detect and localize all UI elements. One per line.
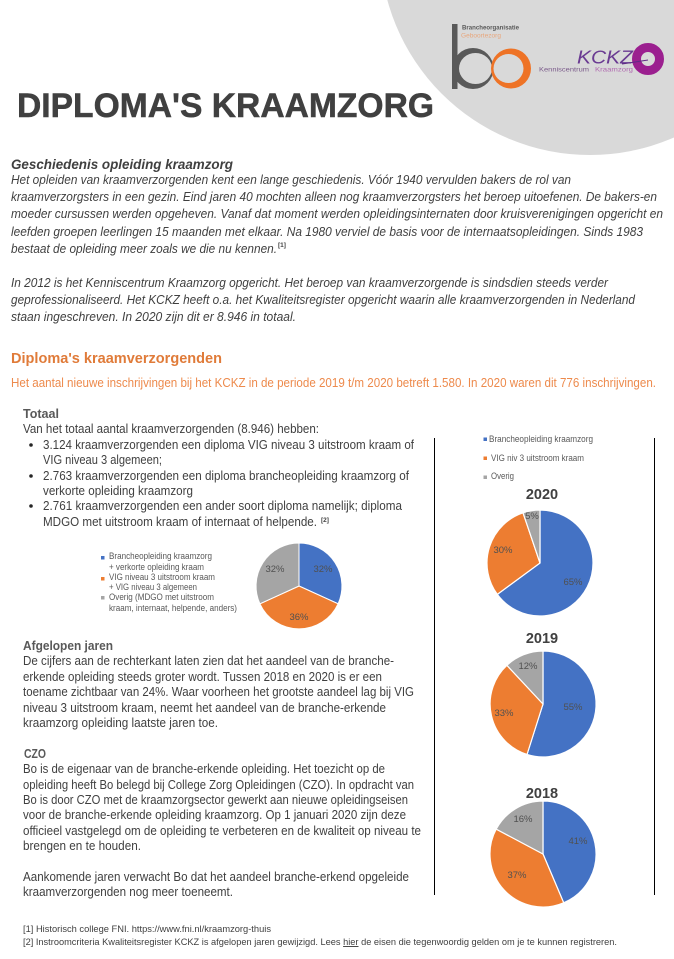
text block: Kenniscentrum: In 2012 is het Kenniscentrum Kraamzorg opgericht. Het beroep van kraamverzorgende is sindsdien steeds verder bbox=[11, 276, 609, 290]
legend: jaren pies: Brancheopleiding kraamzorg bbox=[489, 434, 593, 444]
year label: 2020: 2020 bbox=[526, 487, 558, 503]
footnotes bbox=[23, 924, 617, 948]
pie chart: 2019: 12% bbox=[518, 661, 538, 672]
year label: 2018: 2018 bbox=[526, 786, 558, 802]
right divider line bbox=[654, 438, 655, 895]
legend: totaal pie: Overig (MDGO met uitstroom bbox=[109, 592, 214, 602]
header grey circle bbox=[380, 0, 674, 155]
pie chart: 2020: 65% bbox=[563, 577, 583, 588]
footnotes: [2] Instroomcriteria Kwaliteitsregister KCKZ is afgelopen jaren gewijzigd. Lees hier de eisen die tegenwoordig gelden om je te kunnen registreren. bbox=[23, 937, 617, 948]
text block: CZO: opleiding heeft Bo belegd bij College Zorg Opleidingen (CZO). In opdracht van bbox=[23, 778, 414, 792]
text block: afgelopen jaren bbox=[23, 654, 414, 730]
logo: KCKZ Kenniscentrum Kraamzorg: KCKZ bbox=[577, 48, 634, 68]
logo: KCKZ Kenniscentrum Kraamzorg: Kraamzorg bbox=[595, 66, 633, 74]
text block: geschiedenis: bestaat de opleiding meer zoals we die nu kennen. bbox=[11, 242, 277, 256]
text block: CZO: brengen en te houden. bbox=[23, 839, 141, 853]
pie chart: 2020 bbox=[487, 510, 593, 616]
heading: Diploma's kraamverzorgenden: Diploma's kraamverzorgenden bbox=[11, 350, 222, 367]
text block: vooruitblik: Aankomende jaren verwacht Bo dat het aandeel branche-erkend opgeleide bbox=[23, 870, 409, 884]
text block: geschiedenis bbox=[11, 173, 663, 256]
heading: Afgelopen jaren: Afgelopen jaren bbox=[23, 639, 113, 653]
legend: jaren pies bbox=[484, 434, 593, 481]
text block: CZO: officieel vastgelegd om de opleiding te verbeteren en de kwaliteit op niveau te bbox=[23, 824, 421, 838]
text block: geschiedenis: kraamverzorgsters in een gezin. Eind jaren 40 mochten alleen nog kraamverzorgsters het beroep uitoefenen. De bakers-en bbox=[11, 190, 657, 204]
pie chart: totaal: 32% bbox=[313, 564, 333, 575]
text block: Kenniscentrum: staan ingeschreven. In 2020 zijn dit er 8.946 in totaal. bbox=[11, 310, 296, 324]
heading: Totaal: Totaal bbox=[23, 407, 59, 421]
text block: totaal: verkorte opleiding kraamzorg bbox=[43, 484, 193, 498]
pie chart: 2018 bbox=[490, 801, 596, 907]
text block: vooruitblik bbox=[23, 870, 409, 899]
pie chart: totaal bbox=[256, 543, 342, 629]
legend: totaal pie: VIG niveau 3 uitstroom kraam bbox=[109, 572, 215, 582]
text block: geschiedenis: Het opleiden van kraamverzorgenden kent een lange geschiedenis. Vóór 1940 vervulden bakers de rol van bbox=[11, 173, 571, 187]
legend: totaal pie: Brancheopleiding kraamzorg bbox=[109, 551, 212, 561]
text block: Kenniscentrum bbox=[11, 276, 636, 324]
text block: geschiedenis: moeder cursussen werden opgeheven. Vanaf dat moment werden opleidingsinternaten door kruisverenigingen opgericht en bbox=[11, 207, 663, 221]
text block: totaal: VIG niveau 3 algemeen; bbox=[43, 453, 162, 467]
title: DIPLOMA'S KRAAMZORG bbox=[17, 87, 434, 125]
pie chart: 2020: 30% bbox=[493, 545, 513, 556]
legend: totaal pie: + verkorte opleiding kraam bbox=[109, 562, 204, 572]
text block: afgelopen jaren: kraamzorg opleiding laatste jaren toe. bbox=[23, 716, 218, 730]
logo: Brancheorganisatie Geboortezorg: Brancheorganisatie bbox=[462, 26, 520, 32]
text block: afgelopen jaren: toename zichtbaar van 24%. Waar voorheen het grootste aandeel lag bij VIG bbox=[23, 685, 414, 699]
legend: totaal pie: + VIG niveau 3 algemeen bbox=[109, 582, 197, 592]
logo: Brancheorganisatie Geboortezorg bbox=[452, 24, 531, 89]
logo: KCKZ Kenniscentrum Kraamzorg bbox=[539, 48, 660, 74]
text block: CZO: voor de branche-erkende opleiding kraamzorg. Op 1 januari 2020 zijn deze bbox=[23, 808, 406, 822]
pie chart: 2018: 41% bbox=[568, 836, 588, 847]
pie chart: 2019: 33% bbox=[494, 708, 514, 719]
text block: totaal: [2] bbox=[321, 517, 329, 524]
text block: geschiedenis: [1] bbox=[278, 242, 286, 249]
heading: Geschiedenis opleiding kraamzorg: Geschiedenis opleiding kraamzorg bbox=[11, 156, 233, 172]
text block: totaal: MDGO met uitstroom kraam of internaat of helpende. bbox=[43, 515, 317, 529]
logo: KCKZ Kenniscentrum Kraamzorg: Kenniscentrum bbox=[539, 66, 589, 74]
pie chart: 2018: 37% bbox=[507, 870, 527, 881]
text block: totaal bbox=[23, 422, 414, 529]
year label: 2019: 2019 bbox=[526, 631, 558, 647]
pie chart: 2018: 16% bbox=[513, 814, 533, 825]
pie chart: totaal: 36% bbox=[289, 612, 309, 623]
legend: jaren pies: VIG niv 3 uitstroom kraam bbox=[491, 453, 584, 463]
legend: totaal pie: kraam, internaat, helpende, anders) bbox=[109, 603, 237, 613]
text block: CZO bbox=[23, 762, 421, 853]
left divider line bbox=[434, 438, 435, 895]
text block: totaal: Van het totaal aantal kraamverzorgenden (8.946) hebben: bbox=[23, 422, 319, 436]
pie chart: totaal: 32% bbox=[265, 564, 285, 575]
text block: vooruitblik: kraamverzorgenden nog meer toeneemt. bbox=[23, 885, 233, 899]
pie chart: 2019: 55% bbox=[563, 702, 583, 713]
footnotes: [1] Historisch college FNI. https://www.fni.nl/kraamzorg-thuis bbox=[23, 924, 271, 935]
text block: geschiedenis: leefden groepen leerlingen 15 maanden met elkaar. Na 1980 verviel de basis voor de internaatsopleidingen. Sinds 1983 bbox=[11, 225, 643, 239]
text block: totaal: 2.761 kraamverzorgenden een ander soort diploma namelijk; diploma bbox=[43, 499, 402, 513]
heading: CZO: CZO bbox=[24, 747, 46, 761]
legend: totaal pie bbox=[101, 551, 237, 613]
text block: afgelopen jaren: erkende opleiding steeds groter wordt. Tussen 2018 en 2020 is er een bbox=[23, 670, 382, 684]
text block: Kenniscentrum: geprofessionaliseerd. Het KCKZ heeft o.a. het Kwaliteitsregister opgericht waarin alle kraamverzorgenden in Nederland bbox=[11, 293, 636, 307]
logo: Brancheorganisatie Geboortezorg: Geboortezorg bbox=[461, 34, 501, 40]
pie chart: 2019 bbox=[490, 651, 596, 757]
text block: totaal: 2.763 kraamverzorgenden een diploma brancheopleiding kraamzorg of bbox=[43, 469, 409, 483]
text block: CZO: Bo is de eigenaar van de branche-erkende opleiding. Het toezicht op de bbox=[23, 762, 385, 776]
text block: afgelopen jaren: De cijfers aan de rechterkant laten zien dat het aandeel van de branche- bbox=[23, 654, 394, 668]
text block: CZO: Bo is door CZO met de kraamzorgsector gewerkt aan nieuwe opleidingseisen bbox=[23, 793, 408, 807]
legend: jaren pies: Overig bbox=[491, 471, 514, 481]
pie chart: 2020: 5% bbox=[525, 511, 539, 522]
text block: afgelopen jaren: niveau 3 uitstroom kraam, neemt het aandeel van de branche-erkende bbox=[23, 701, 386, 715]
text block: totaal: 3.124 kraamverzorgenden een diploma VIG niveau 3 uitstroom kraam of bbox=[43, 438, 414, 452]
